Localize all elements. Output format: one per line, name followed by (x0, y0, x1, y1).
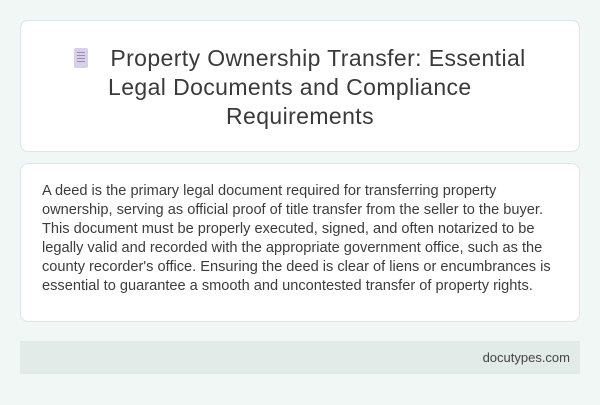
title: Property Ownership Transfer: Essential (110, 45, 526, 71)
footer bar (20, 341, 580, 374)
text block: legally valid and recorded with the appropriate government office, such as the (42, 240, 542, 256)
text block: county recorder's office. Ensuring the deed is clear of liens or encumbrances is (42, 259, 551, 275)
icon: document (74, 48, 88, 68)
text block: A deed is the primary legal document required for transferring property (42, 183, 496, 199)
title (74, 45, 526, 129)
text block: ownership, serving as official proof of title transfer from the seller to the buyer. (42, 202, 543, 218)
title: Legal Documents and Compliance (108, 74, 472, 100)
text block: essential to guarantee a smooth and uncontested transfer of property rights. (42, 278, 533, 294)
footer text: docutypes.com (483, 350, 570, 365)
title: Requirements (226, 103, 374, 129)
panel: description (20, 163, 580, 322)
text block: This document must be properly executed, signed, and often notarized to be (42, 221, 534, 237)
text block (42, 183, 551, 294)
panel: title card (20, 20, 580, 152)
